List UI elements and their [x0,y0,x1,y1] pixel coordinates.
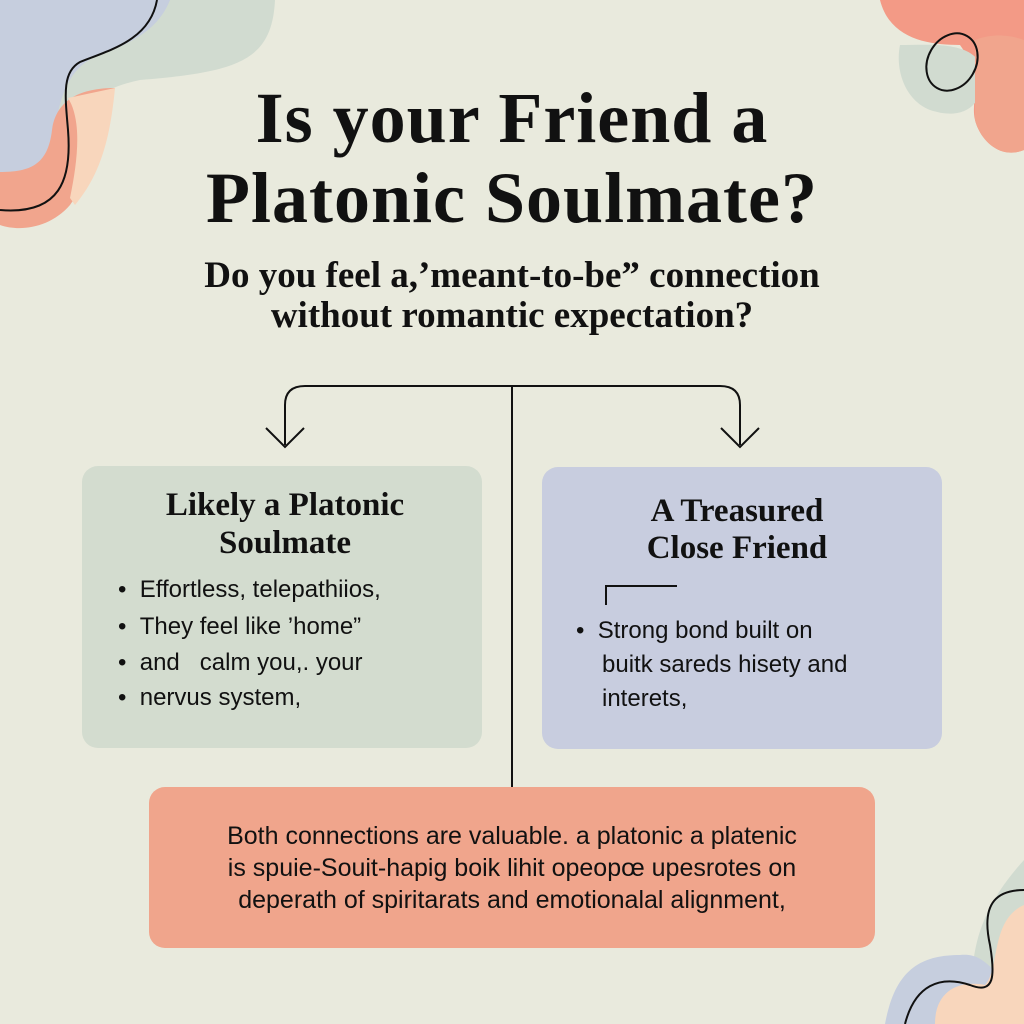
heading: Close Friend [647,530,827,566]
subtitle [204,255,820,336]
heading: A Treasured [651,493,823,529]
subtitle: Do you feel a,’meant-to-be” connection [204,255,820,296]
title: Platonic Soulmate? [206,158,818,238]
title: Is your Friend a [256,78,768,158]
heading [647,493,827,566]
callout: conclusion: Both connections are valuable. a platonic a platenic [227,822,797,850]
callout: conclusion: is spuie-Souit-hapig boik lihit opeopœ upesrotes on [228,854,796,882]
bullet text: buitk sareds hisety and [602,651,847,678]
bullet list: • and calm you,. your [118,649,363,676]
heading [166,487,404,561]
bullet list: • Effortless, telepathiios, [118,576,381,603]
panel: treasured close friend [542,467,942,749]
bullet text [576,617,847,712]
heading: Soulmate [219,525,351,561]
bullet text: • Strong bond built on [576,617,813,644]
callout: conclusion: deperath of spiritarats and emotionalal alignment, [238,886,786,914]
panel: likely a platonic soulmate [82,466,482,748]
callout: conclusion [149,787,875,948]
bullet list: • nervus system, [118,684,301,711]
title [206,78,818,238]
subtitle: without romantic expectation? [271,295,753,336]
bracket mark [605,585,677,605]
bullet list [118,576,381,711]
bullet text: interets, [602,685,687,712]
bullet list: • They feel like ’home” [118,613,361,640]
heading: Likely a Platonic [166,487,404,523]
